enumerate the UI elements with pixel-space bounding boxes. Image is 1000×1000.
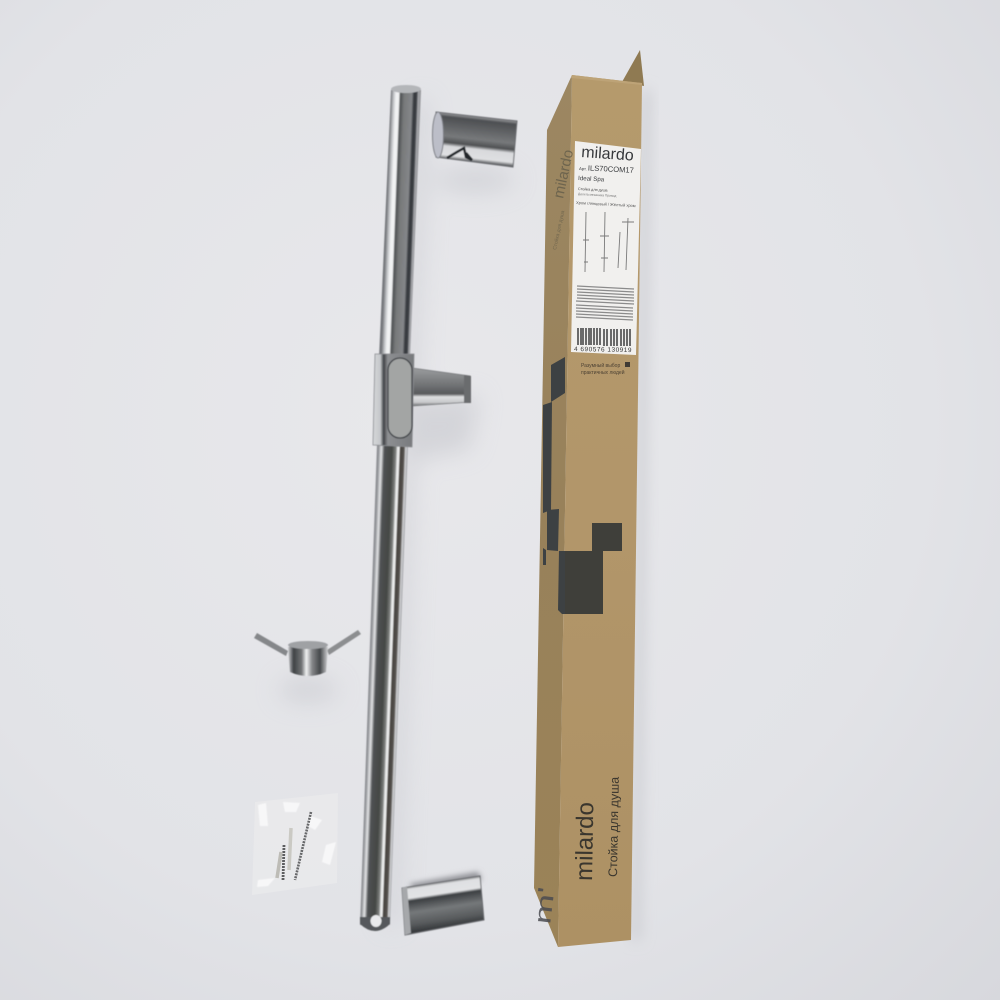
slogan: Разумный выбор [581, 362, 620, 369]
top wall bracket [432, 112, 517, 167]
screw long [295, 812, 311, 880]
side block 5 [558, 551, 566, 614]
bag highlights [257, 802, 336, 887]
front dark block logo [565, 523, 622, 614]
label sheet [571, 141, 641, 355]
side subtitle: Стойка для душа [551, 210, 566, 250]
side block 4 [543, 548, 546, 565]
box top edge [571, 75, 642, 85]
box flap [622, 50, 644, 86]
wall plug left [277, 852, 281, 878]
barcode digits: 4 690576 130919 [574, 346, 632, 354]
side brand text: milardo [550, 148, 577, 200]
bottom wall bracket [402, 876, 484, 935]
bracket clip [447, 148, 472, 160]
rail bottom end [360, 917, 390, 931]
shower rail [360, 85, 421, 931]
wall plug right [289, 828, 291, 870]
product subline: Дельта механика Привод [578, 192, 617, 198]
side block 3 [547, 509, 559, 551]
side block 2 [543, 402, 552, 513]
technical drawings [583, 212, 634, 272]
box side face [534, 75, 572, 947]
holder arm tip [464, 375, 471, 403]
hook right arm [327, 630, 361, 655]
bracket end cap [432, 112, 444, 158]
soft shadows [278, 100, 515, 925]
box front face [558, 75, 642, 947]
rail upper section [379, 90, 421, 358]
hook top [288, 641, 328, 649]
hook body [288, 644, 328, 676]
product name: Стойка для душа [578, 187, 609, 193]
article number: Арт. ILS70COM17 [579, 163, 634, 175]
rail lower section [360, 444, 408, 925]
bag of screws [252, 793, 338, 895]
box shadow [632, 90, 650, 940]
side large letter: m' [530, 886, 560, 926]
finish: Хром глянцевый / Жёлтый хром [576, 200, 636, 208]
screw short [283, 845, 284, 880]
sliding holder [373, 354, 471, 447]
product label [571, 141, 641, 355]
bottom bracket contact shadow [410, 872, 482, 890]
rail end hole [370, 915, 382, 927]
holder body [373, 354, 414, 447]
fine print block 2 [576, 305, 633, 320]
holder arm [412, 368, 470, 406]
bottom brand: milardo [571, 802, 599, 881]
product box [530, 50, 650, 947]
side block 1 [551, 357, 565, 402]
slogan square [625, 362, 630, 367]
plastic bag [252, 793, 338, 895]
rail top cap [391, 85, 421, 93]
holder grey button [388, 358, 412, 438]
fine print block 1 [576, 286, 634, 304]
hook left arm [254, 633, 288, 656]
label brand: milardo [581, 144, 634, 165]
wall hook [254, 630, 361, 676]
side face graphics [543, 357, 566, 614]
series name: Ideal Spa [578, 175, 605, 183]
slogan: практичных людей [581, 369, 625, 376]
bottom product name: Стойка для душа [606, 777, 622, 877]
barcode [578, 328, 630, 346]
bracket end cap [402, 886, 411, 935]
